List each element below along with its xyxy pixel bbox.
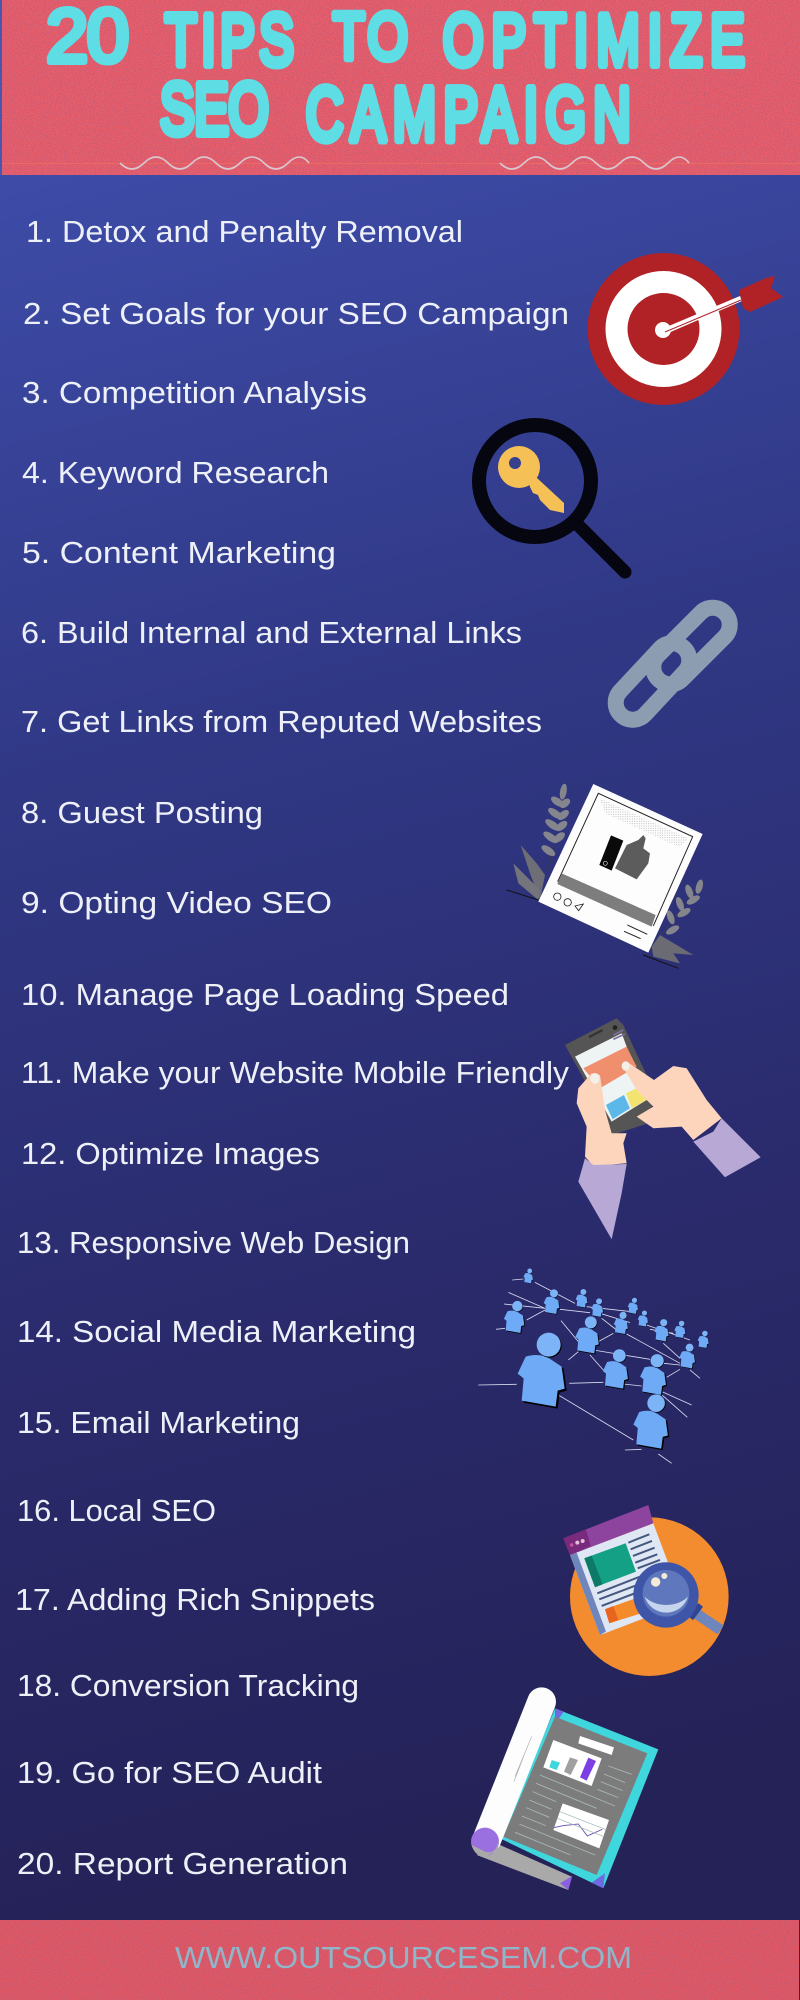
decorative squiggle: left <box>120 157 309 169</box>
tips list: 18. Conversion Tracking <box>17 1668 359 1703</box>
tips list <box>15 214 570 1881</box>
tips list: 20. Report Generation <box>17 1846 348 1881</box>
left sleeve <box>578 1158 627 1239</box>
tips list: 9. Opting Video SEO <box>21 885 332 920</box>
title <box>46 0 745 156</box>
title: TO <box>333 0 408 73</box>
icon: social network people <box>478 1269 709 1463</box>
tips list: 1. Detox and Penalty Removal <box>26 214 463 249</box>
panel: header banner <box>0 0 800 175</box>
tips list: 5. Content Marketing <box>22 535 336 570</box>
tips list: 16. Local SEO <box>17 1493 216 1528</box>
tips list: 14. Social Media Marketing <box>17 1314 416 1349</box>
right sleeve <box>693 1118 761 1177</box>
left hand <box>577 1073 627 1166</box>
tips list: 17. Adding Rich Snippets <box>15 1582 375 1617</box>
tips list: 12. Optimize Images <box>21 1136 320 1171</box>
icon: social post with thumbs up <box>507 783 704 968</box>
title: TIPS <box>165 1 294 81</box>
photo frame <box>538 784 703 953</box>
footer website url: WWW.OUTSOURCESEM.COM <box>175 1940 632 1975</box>
icon: web page under magnifier on orange circle <box>563 1505 729 1676</box>
icon: magnifier with key <box>479 425 625 572</box>
right hand <box>622 1063 722 1140</box>
panel: footer banner <box>0 1920 800 2000</box>
tips list: 19. Go for SEO Audit <box>17 1755 322 1790</box>
tips list: 6. Build Internal and External Links <box>21 615 522 650</box>
tips list: 3. Competition Analysis <box>22 375 367 410</box>
title: SEO <box>160 70 269 150</box>
plant leaves <box>507 783 704 968</box>
report contents <box>578 1736 614 1755</box>
tips list: 10. Manage Page Loading Speed <box>21 977 509 1012</box>
tips list: 4. Keyword Research <box>22 455 329 490</box>
icon: chain link <box>609 601 737 727</box>
reactions <box>554 893 561 900</box>
icon: hands holding phone <box>565 1018 761 1239</box>
thumb up <box>615 835 650 879</box>
icon: target with arrow <box>588 253 783 405</box>
decorative squiggle: right <box>500 157 689 169</box>
tips list: 15. Email Marketing <box>17 1405 300 1440</box>
tips list: 2. Set Goals for your SEO Campaign <box>23 296 569 331</box>
network lines <box>478 1279 700 1463</box>
tips list: 8. Guest Posting <box>21 795 263 830</box>
tips list: 7. Get Links from Reputed Websites <box>21 704 542 739</box>
title: OPTIMIZE <box>443 1 745 81</box>
tips list: 11. Make your Website Mobile Friendly <box>21 1055 570 1090</box>
tips list: 13. Responsive Web Design <box>17 1225 410 1260</box>
title: CAMPAIGN <box>306 71 631 156</box>
icon: rolled report document <box>471 1702 658 1890</box>
